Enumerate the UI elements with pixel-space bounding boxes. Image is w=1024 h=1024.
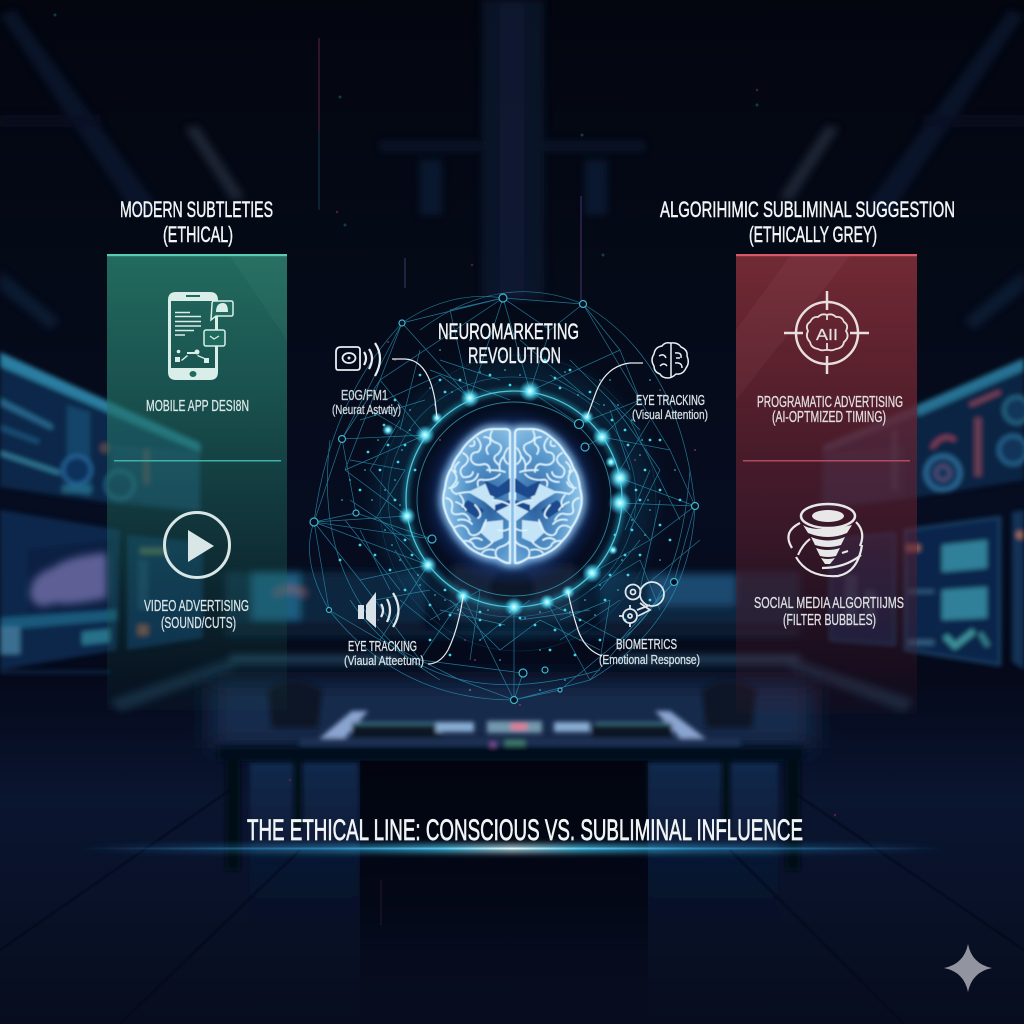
glowing cyan node dust: [340, 360, 680, 655]
label: mobile app design: MOBILE APP DESI8N: [146, 398, 249, 415]
label: social media algorithms: [754, 595, 904, 629]
label: EEG/fMRI neural activity: (Neurat Astwtiy): [332, 402, 401, 417]
label: video advertising: VIDEO ADVERTISING: [144, 598, 249, 615]
label: programmatic advertising: (AI-OPTMIZED TIMING): [772, 409, 886, 426]
icon: brain with eye tracking: [652, 343, 688, 378]
label: EEG/fMRI neural activity: E0G/FM1: [341, 388, 388, 404]
label: programmatic advertising: PROGRAMATIC ADVERTISING: [757, 394, 903, 411]
chart: neural network ring diagram: [309, 292, 700, 705]
icon: AI target crosshair: AII: [816, 327, 838, 344]
heading: modern subtleties: MODERN SUBTLETIES: [120, 197, 273, 222]
glowing divider line under title: [80, 844, 944, 853]
rear screens: [110, 565, 914, 712]
arrow: EEG connector: [392, 359, 437, 418]
arrow: speaker connector: [428, 597, 463, 664]
icon: four-point sparkle watermark: [944, 944, 992, 992]
label: social media algorithms: SOCIAL MEDIA ALGORTIIJMS: [754, 595, 904, 612]
icon: biometric gears: [619, 582, 664, 627]
label: video advertising: [144, 598, 249, 632]
bright glow nodes: [382, 380, 632, 617]
heading: neuromarketing revolution: REVOLUTION: [468, 343, 561, 368]
label: eye tracking visual attention (top right): (Visual Attention): [632, 407, 708, 422]
heading: algorithmic subliminal suggestion: (ETHICALLY GREY): [749, 222, 877, 247]
icon: speaker with sound waves: [358, 592, 398, 628]
ceiling beams: [0, 0, 1024, 330]
outlined network hubs: [310, 294, 698, 704]
desk with equipment: [0, 680, 1024, 1024]
heading: modern subtleties: [120, 197, 273, 247]
panel: modern subtleties (ethical): [107, 254, 287, 710]
arrow: biometrics connector: [568, 592, 602, 656]
label: biometrics emotional response: (Emotional Response): [599, 652, 700, 667]
arrow: eye tracking connector: [587, 363, 643, 417]
label: eye tracking visual attention (bottom left): (Viaual Atteetum): [344, 653, 424, 668]
heading: algorithmic subliminal suggestion: [660, 197, 955, 247]
label: eye tracking visual attention (top right): [632, 393, 708, 422]
heading: neuromarketing revolution: [438, 319, 579, 368]
icon: glowing brain: [420, 405, 604, 589]
label: eye tracking visual attention (top right): EYE TRACKING: [636, 393, 705, 409]
label: EEG/fMRI neural activity: [332, 388, 401, 417]
label: eye tracking visual attention (bottom left): EYE TRACKING: [348, 639, 417, 655]
right monitors: [820, 358, 1024, 670]
faint magenta particles: [378, 342, 695, 705]
soft cyan glow around ring: [392, 377, 636, 621]
label: eye tracking visual attention (bottom left): [344, 639, 424, 668]
panel: algorithmic subliminal suggestion (ethically grey): [736, 254, 917, 714]
label: biometrics emotional response: BIOMETRICS: [616, 637, 677, 653]
network connection lines: [309, 292, 700, 700]
icon: AI target crosshair: [784, 291, 869, 374]
icon: video play button: [164, 512, 230, 578]
icon: algorithm tornado funnel: [788, 504, 862, 576]
hemisphere deep folds: [468, 483, 510, 543]
label: biometrics emotional response: [599, 637, 700, 667]
left monitors: [0, 352, 203, 674]
label: programmatic advertising: [757, 394, 903, 426]
icon: EEG/fMRI scanner: [336, 343, 380, 376]
main orbit ring: [406, 391, 622, 607]
icon: mobile phone with chat bubbles: [168, 292, 233, 380]
label: social media algorithms: (FILTER BUBBLES): [783, 612, 876, 629]
heading: modern subtleties: (ETHICAL): [163, 222, 233, 247]
label: video advertising: (SOUND/CUTS): [161, 615, 236, 632]
neon streaks and dust: [55, 15, 835, 925]
heading: neuromarketing revolution: NEUROMARKETING: [438, 319, 579, 344]
